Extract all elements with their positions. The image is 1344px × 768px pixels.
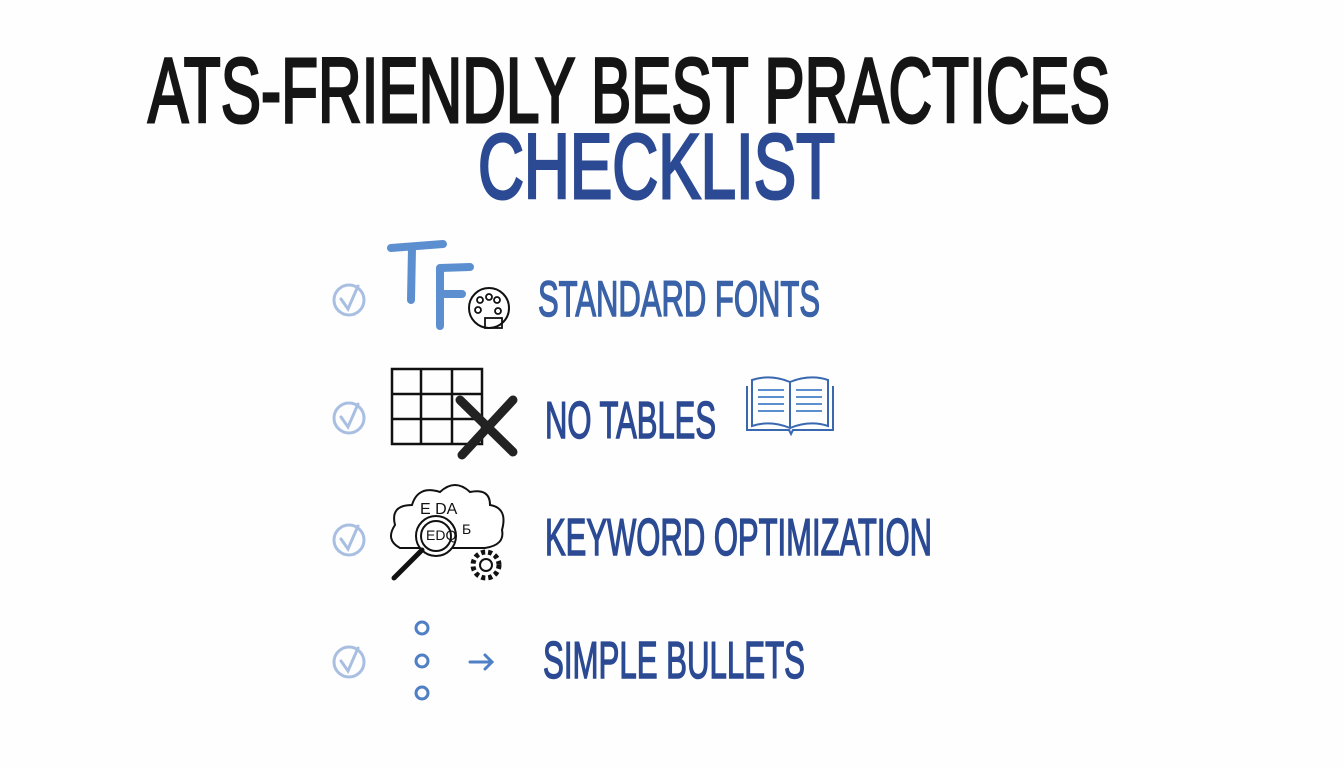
title: CHECKLIST bbox=[478, 116, 835, 218]
label: SIMPLE BULLETS bbox=[543, 632, 805, 690]
icon: bullets arrow bbox=[416, 622, 492, 699]
label: NO TABLES bbox=[545, 392, 716, 450]
icon: keyword cloud search: Б bbox=[462, 521, 471, 537]
row: standard fonts bbox=[334, 244, 820, 328]
row: simple bullets bbox=[334, 622, 805, 699]
row: keyword optimization bbox=[334, 485, 932, 578]
icon: open book bbox=[747, 377, 833, 434]
icon: check circle bbox=[334, 647, 364, 677]
icon: check circle bbox=[334, 403, 364, 433]
title bbox=[148, 40, 1110, 218]
icon: keyword cloud search bbox=[391, 485, 504, 578]
row: no tables bbox=[334, 369, 833, 455]
icon: fonts palette bbox=[391, 244, 509, 328]
icon: check circle bbox=[334, 285, 364, 315]
label: KEYWORD OPTIMIZATION bbox=[545, 509, 932, 567]
icon: keyword cloud search: E DA bbox=[420, 501, 458, 518]
label: STANDARD FONTS bbox=[538, 271, 820, 327]
icon: check circle bbox=[334, 525, 364, 555]
icon: keyword cloud search: EDQ bbox=[426, 527, 456, 543]
icon: table crossed bbox=[392, 369, 513, 455]
